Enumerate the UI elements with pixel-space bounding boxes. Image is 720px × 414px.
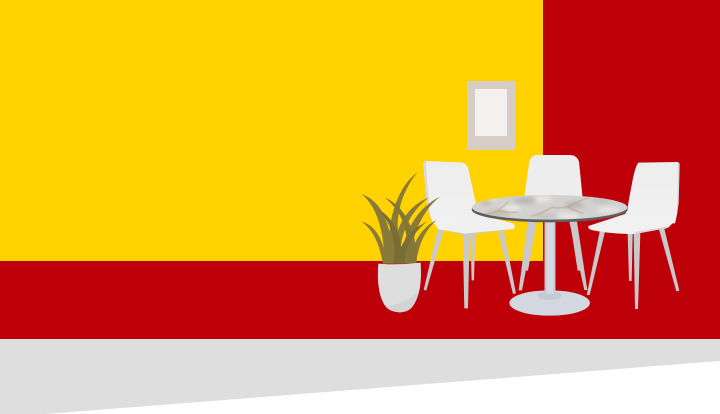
chair: left bbox=[423, 161, 516, 308]
wall: yellow panel bbox=[0, 0, 543, 261]
centre chair back bbox=[524, 155, 583, 198]
right chair back edge bbox=[677, 162, 680, 215]
plant pot bbox=[378, 263, 421, 312]
left chair seat bbox=[432, 213, 515, 236]
right chair back bbox=[624, 162, 679, 223]
floor: grey wedge bbox=[0, 339, 720, 414]
plant bbox=[362, 172, 440, 312]
picture frame bbox=[467, 81, 515, 150]
marble surface bbox=[472, 195, 628, 220]
table top bbox=[472, 195, 628, 222]
table base and column bbox=[509, 220, 590, 316]
centre chair legs bbox=[519, 222, 587, 290]
table rim bbox=[472, 197, 628, 222]
chair: right bbox=[587, 162, 680, 309]
table column bbox=[545, 220, 555, 294]
right chair seat bbox=[588, 214, 675, 234]
chair: back centre bbox=[519, 155, 587, 290]
left chair back edge bbox=[423, 161, 432, 221]
table base bbox=[509, 290, 590, 316]
left chair legs bbox=[424, 229, 516, 308]
left chair back bbox=[423, 161, 477, 223]
right chair legs bbox=[587, 229, 679, 309]
plant leaves bbox=[362, 172, 440, 264]
